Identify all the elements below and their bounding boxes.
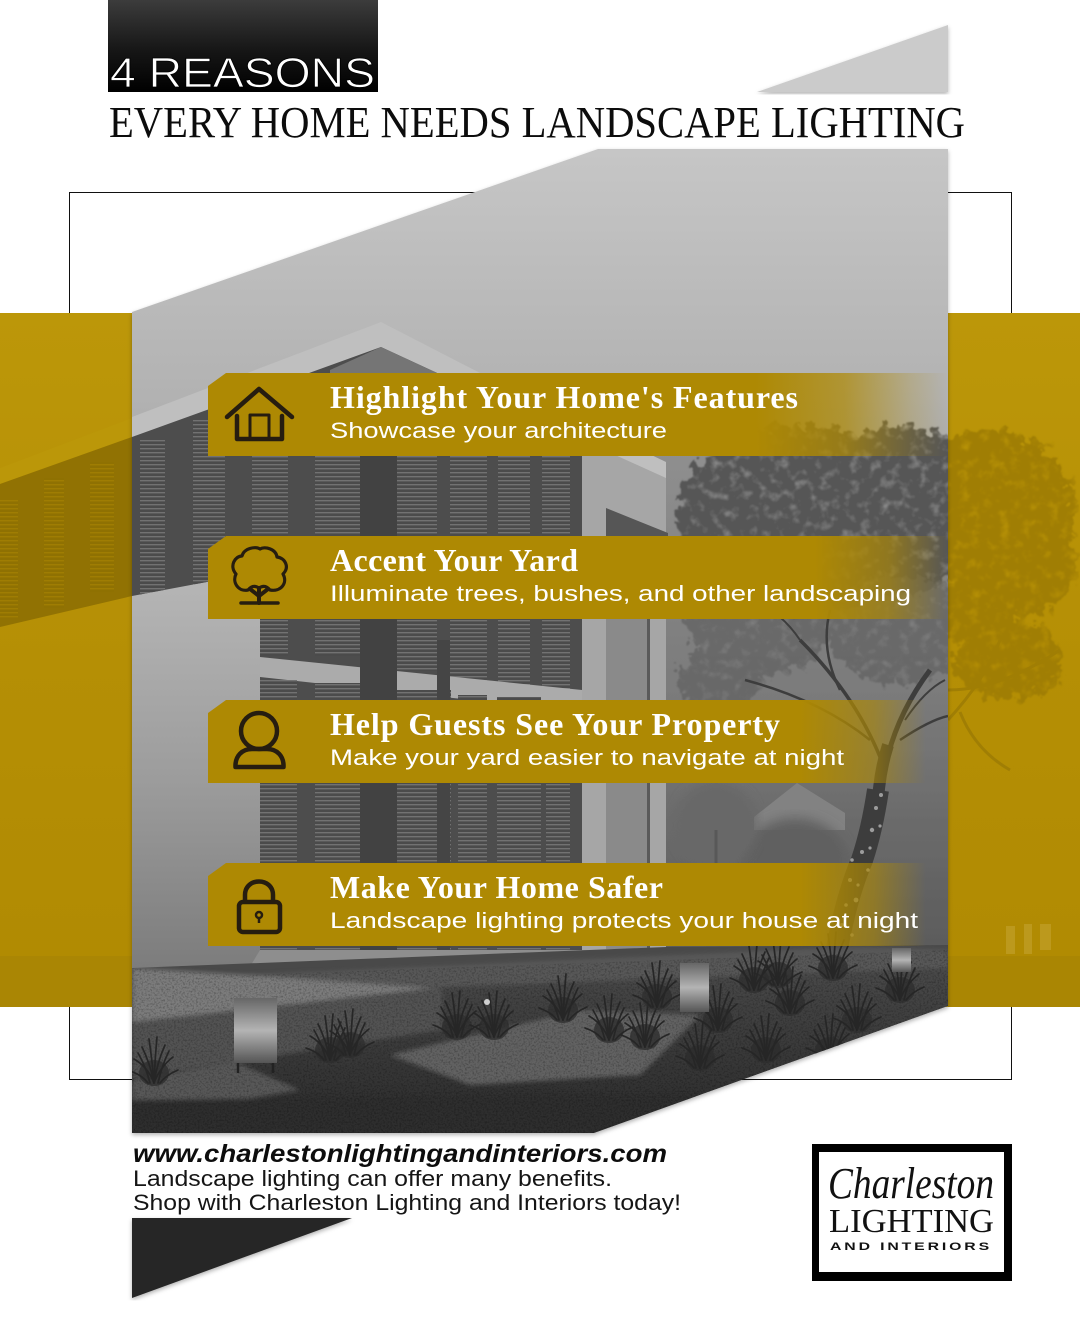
logo: Charleston Lighting and Interiors xyxy=(812,1144,1012,1281)
title: 4 reasons banner xyxy=(108,0,378,96)
heading: help guests: Help Guests See Your Property xyxy=(330,706,780,742)
photo tree xyxy=(674,420,948,942)
panel: main photo xyxy=(130,149,990,1133)
icon: person xyxy=(235,713,284,767)
title: subtitle: EVERY HOME NEEDS LANDSCAPE LIGHTING xyxy=(109,98,965,147)
photo sky xyxy=(132,149,948,1009)
heading: highlight features: Highlight Your Home's Features xyxy=(330,379,798,415)
decorative top triangle xyxy=(757,25,948,92)
footer text block: www.charlestonlightingandinteriors.com xyxy=(133,1140,667,1168)
decorative bottom triangle xyxy=(132,1218,352,1298)
reason ribbon: accent yard xyxy=(208,536,948,619)
heading: accent yard: Accent Your Yard xyxy=(330,542,578,578)
text: protects: Landscape lighting protects your house at night xyxy=(330,908,918,933)
photo building wall xyxy=(132,440,668,968)
left gold building overlay xyxy=(0,418,132,1007)
photo louvres xyxy=(132,340,582,965)
footer text block: Shop with Charleston Lighting and Interiors today! xyxy=(133,1190,681,1215)
photo plants xyxy=(130,932,924,1086)
reason ribbon: highlight features xyxy=(208,373,948,456)
logo: Charleston Lighting and Interiors: LIGHTING xyxy=(829,1203,994,1240)
icon: tree xyxy=(233,548,286,603)
reason ribbon: safer xyxy=(208,863,948,946)
photo building fascia xyxy=(132,336,666,478)
photo garden lamps xyxy=(234,948,911,1073)
text: illuminate: Illuminate trees, bushes, and other landscaping xyxy=(330,581,911,606)
text: showcase: Showcase your architecture xyxy=(330,418,667,443)
photo foggy garden xyxy=(650,440,948,970)
gold horizontal band xyxy=(0,313,1080,1007)
thin outline frame xyxy=(70,192,1012,1080)
icon: house xyxy=(227,389,292,439)
footer text block: Landscape lighting can offer many benefits. xyxy=(133,1166,612,1191)
title: 4 reasons banner: 4 REASONS xyxy=(110,49,375,96)
photo ground xyxy=(132,945,948,1133)
icon: padlock xyxy=(239,882,280,932)
reason ribbon: help guests xyxy=(208,700,948,783)
right gold tree overlay xyxy=(905,430,1080,1007)
text: navigate: Make your yard easier to navigate at night xyxy=(330,745,844,770)
heading: safer: Make Your Home Safer xyxy=(330,869,663,905)
logo: Charleston Lighting and Interiors: AND INTERIORS xyxy=(830,1241,992,1253)
footer text block xyxy=(133,1140,681,1215)
logo: Charleston Lighting and Interiors: Charleston xyxy=(828,1159,994,1208)
